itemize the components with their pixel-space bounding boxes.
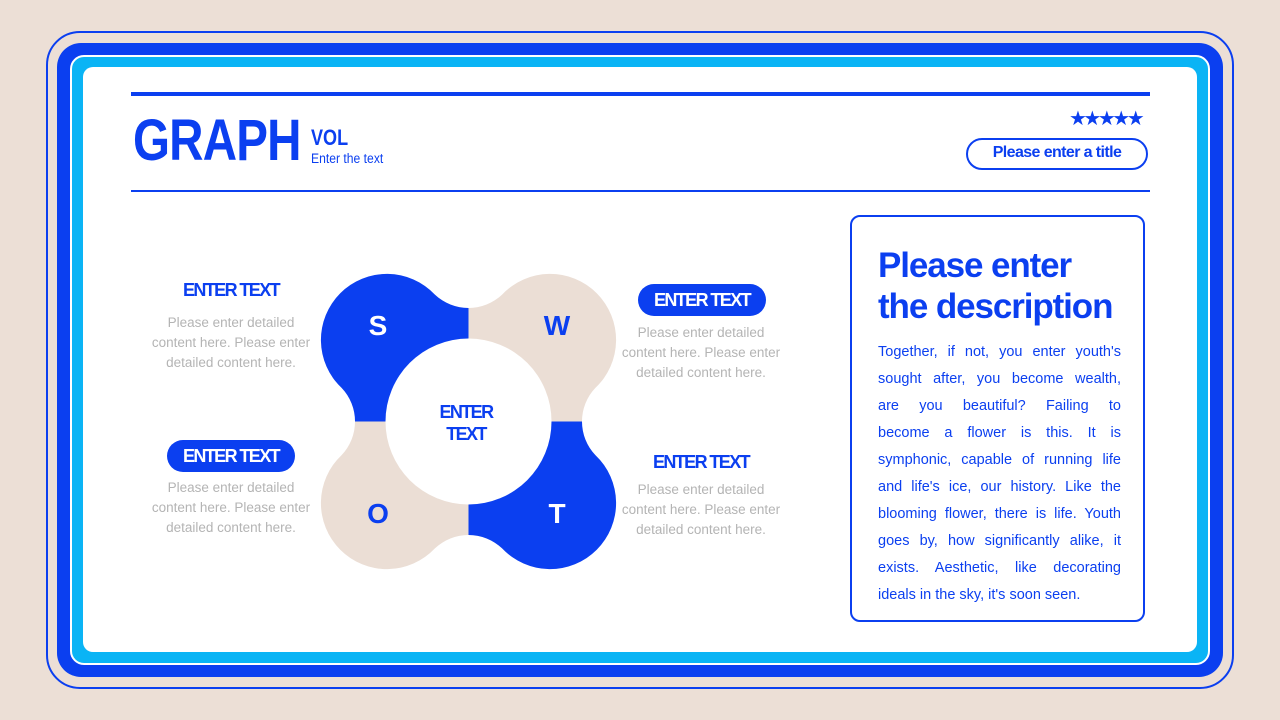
description body: symphonic, capable of running life (878, 452, 1121, 468)
letters: S (369, 310, 387, 341)
subtitle: Enter the text (311, 151, 383, 166)
block O: ENTER TEXT (183, 446, 279, 466)
block O: Please enter detailed (168, 480, 294, 495)
title pill (966, 138, 1148, 170)
description body: sought after, you become wealth, (878, 371, 1121, 387)
white card (83, 67, 1197, 652)
description body: and life's ice, our history. Like the (878, 479, 1121, 495)
description body: ideals in the sky, it's soon seen. (878, 587, 1080, 603)
block T: ENTER TEXT (653, 452, 749, 472)
quadrant O (321, 422, 468, 570)
block W: detailed content here. (636, 365, 766, 380)
block T: Please enter detailed (638, 482, 764, 497)
description body: are you beautiful? Failing to (878, 398, 1121, 414)
description body (878, 344, 1121, 603)
letters: T (548, 498, 566, 529)
description body: Together, if not, you enter youth's (878, 344, 1121, 360)
subtitle: VOL (311, 125, 348, 150)
quadrant S (320, 274, 468, 422)
center circle (386, 338, 552, 504)
block S: Please enter detailed (168, 315, 294, 330)
block S (152, 280, 310, 370)
center label: ENTER (439, 402, 494, 422)
letters: O (367, 498, 389, 529)
description heading: Please enter (878, 246, 1071, 285)
description body: become a flower is this. It is (878, 425, 1121, 441)
letters: W (544, 310, 571, 341)
letters (367, 310, 571, 529)
block W (622, 284, 780, 380)
title: GRAPH (133, 108, 301, 173)
description body: goes by, how significantly alike, it (878, 533, 1121, 549)
center label: TEXT (446, 424, 487, 444)
block T (622, 452, 780, 537)
description heading: the description (878, 287, 1112, 326)
block T: detailed content here. (636, 522, 766, 537)
center label (439, 402, 494, 444)
quadrant T (468, 422, 616, 570)
description body: exists. Aesthetic, like decorating (878, 560, 1121, 576)
description body: blooming flower, there is life. Youth (878, 506, 1121, 522)
subtitle (311, 125, 384, 166)
panel: description (850, 215, 1145, 622)
block T: content here. Please enter (622, 502, 780, 517)
SWOT diagram (320, 274, 616, 570)
block O: detailed content here. (166, 520, 296, 535)
block O (152, 440, 310, 535)
block W: content here. Please enter (622, 345, 780, 360)
block S: ENTER TEXT (183, 280, 279, 300)
description heading (878, 246, 1112, 326)
block O: content here. Please enter (152, 500, 310, 515)
block W: ENTER TEXT (654, 290, 750, 310)
quadrant W (468, 274, 616, 422)
block S: detailed content here. (166, 355, 296, 370)
block W: Please enter detailed (638, 325, 764, 340)
icon: stars: ★★★★★ (1069, 108, 1141, 130)
title pill: Please enter a title (993, 144, 1121, 161)
block S: content here. Please enter (152, 335, 310, 350)
